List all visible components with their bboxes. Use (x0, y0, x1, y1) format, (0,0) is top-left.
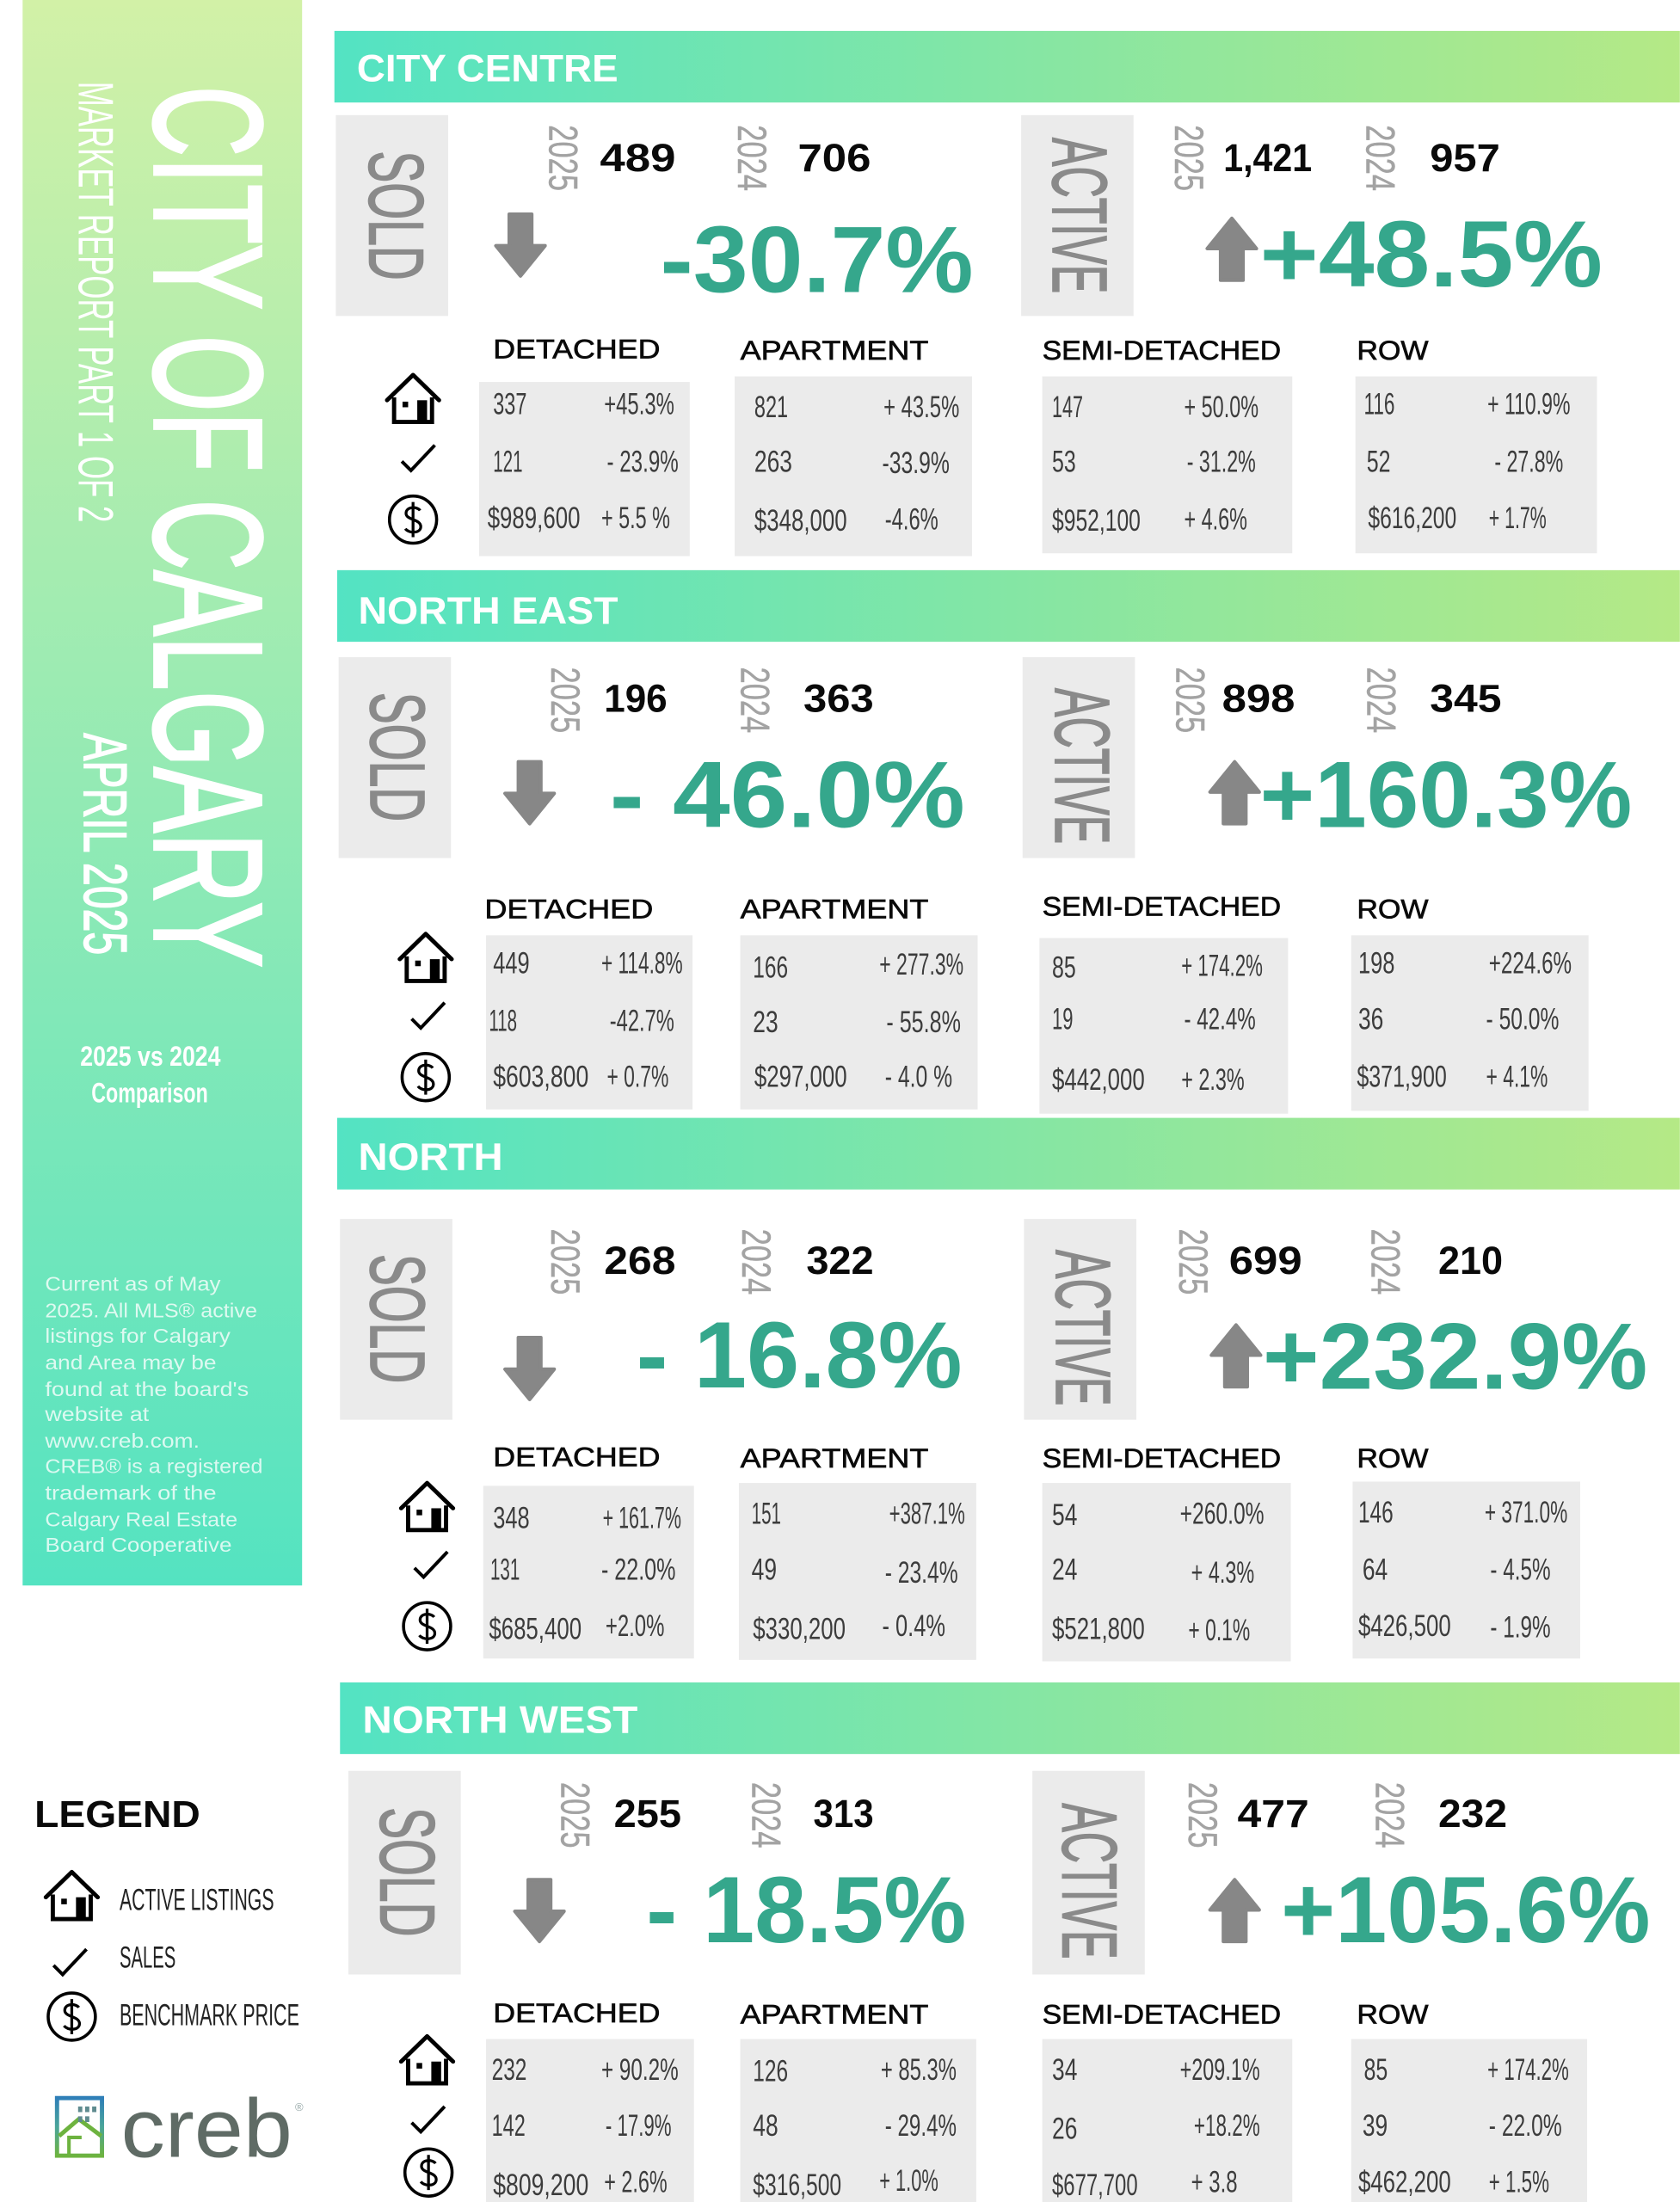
sold label: SOLD (353, 151, 439, 280)
icon: check (412, 2107, 445, 2131)
banner title: NORTH EAST (358, 590, 618, 632)
table: row: 64 (1363, 1553, 1388, 1587)
icon: house (400, 934, 452, 981)
panel: north (337, 1118, 1680, 1661)
table: semi-detached: + 174.2% (1181, 950, 1263, 983)
comparison label line two: Comparison (91, 1077, 208, 1109)
creb logo (57, 2083, 304, 2175)
table: semi-detached: + 0.1% (1188, 1614, 1250, 1647)
sold box (348, 1771, 461, 1975)
disclaimer text: listings for Calgary (45, 1325, 231, 1347)
active 2025 value: 699 (1229, 1239, 1302, 1282)
table: detached: + 161.7% (603, 1501, 681, 1535)
sold percent change: - 16.8% (637, 1303, 963, 1408)
table: apartment: + 85.3% (881, 2053, 957, 2087)
table: row: - 27.8% (1494, 446, 1563, 479)
icon: house (401, 1483, 453, 1530)
report date: APRIL 2025 (71, 733, 139, 955)
table: detached: - 22.0% (601, 1553, 675, 1587)
table: row: +224.6% (1489, 946, 1572, 980)
arrow down (515, 1879, 564, 1941)
legend sales: SALES (120, 1941, 175, 1974)
table: detached: 232 (492, 2053, 526, 2087)
legend heading: LEGEND (34, 1794, 200, 1836)
table: row (1356, 377, 1597, 553)
table: semi-detached (1043, 2039, 1292, 2202)
table: semi-detached: - 31.2% (1187, 446, 1256, 479)
table: apartment: - 4.0 % (885, 1061, 952, 1094)
table: apartment: - 55.8% (886, 1006, 961, 1039)
heading detached: DETACHED (493, 1997, 661, 2028)
sold label: SOLD (354, 1254, 440, 1383)
arrow up (1211, 1325, 1260, 1387)
table: detached: $809,200 (493, 2168, 588, 2202)
table: row: $371,900 (1357, 1061, 1447, 1094)
year 2025: 2025 (1166, 125, 1211, 191)
heading apartment: APARTMENT (741, 1442, 928, 1473)
table: semi-detached: 26 (1052, 2113, 1077, 2146)
table: row: 85 (1363, 2053, 1388, 2087)
icon: dollar (403, 1602, 451, 1650)
table: row: + 1.5% (1489, 2166, 1549, 2199)
table: row: + 174.2% (1487, 2053, 1569, 2087)
year 2025: 2025 (540, 125, 586, 191)
icon: house (401, 2036, 453, 2083)
table: semi-detached: 54 (1052, 1498, 1077, 1532)
year 2024: 2024 (1362, 1229, 1407, 1295)
year 2025: 2025 (542, 1229, 588, 1295)
heading semi-detached: SEMI-DETACHED (1043, 1999, 1281, 2030)
table: row: - 4.5% (1490, 1553, 1551, 1587)
table: apartment: +387.1% (889, 1497, 965, 1530)
table: semi-detached: 24 (1052, 1553, 1077, 1587)
table: apartment: 23 (753, 1006, 778, 1039)
icon: check (415, 1552, 447, 1577)
heading row: ROW (1357, 1442, 1429, 1473)
year 2025: 2025 (1179, 1782, 1225, 1848)
sold percent change: - 46.0% (610, 743, 965, 848)
active label: ACTIVE (1039, 1250, 1125, 1405)
table: row: 39 (1363, 2109, 1388, 2143)
table: detached: 142 (492, 2109, 526, 2143)
table: apartment (735, 377, 972, 557)
sold box (340, 1219, 452, 1420)
panel: north west (340, 1682, 1680, 2202)
table: semi-detached: - 42.4% (1184, 1003, 1256, 1036)
active percent change: +48.5% (1260, 202, 1603, 307)
table: semi-detached: $521,800 (1052, 1612, 1145, 1645)
active label: ACTIVE (1038, 688, 1124, 844)
sidebar subtitle: MARKET REPORT PART 1 OF 2 (68, 82, 123, 522)
active 2024 value: 210 (1438, 1239, 1503, 1282)
legend active listings: ACTIVE LISTINGS (120, 1883, 274, 1916)
table: row: + 110.9% (1487, 388, 1570, 421)
table: apartment: $348,000 (754, 504, 847, 538)
table: semi-detached (1043, 1483, 1291, 1661)
disclaimer text: CREB® is a registered (45, 1455, 262, 1478)
table: apartment: -33.9% (882, 446, 950, 480)
active 2025 value: 477 (1238, 1792, 1309, 1836)
icon: dollar (390, 496, 437, 544)
creb logo: creb (121, 2083, 292, 2175)
sold 2024 value: 363 (803, 677, 874, 721)
table: detached: 449 (493, 946, 530, 980)
active box (1032, 1771, 1145, 1975)
table: row: - 50.0% (1486, 1003, 1559, 1036)
heading semi-detached: SEMI-DETACHED (1043, 335, 1281, 366)
table: apartment (741, 2039, 976, 2202)
table: apartment: 151 (752, 1497, 781, 1530)
icon: check (402, 446, 434, 471)
active percent change: +160.3% (1260, 743, 1632, 848)
active 2025 value: 898 (1222, 677, 1295, 721)
table: detached: + 2.6% (604, 2166, 668, 2199)
banner (340, 1682, 1680, 1754)
year 2024: 2024 (1366, 1782, 1412, 1848)
disclaimer text (44, 1272, 262, 1556)
table: detached: +45.3% (604, 388, 674, 421)
table: detached: -42.7% (610, 1004, 674, 1037)
table: apartment: + 43.5% (883, 391, 959, 424)
heading detached: DETACHED (484, 894, 653, 925)
table: apartment: 126 (753, 2055, 788, 2088)
table: apartment: 166 (753, 950, 788, 984)
sold 2025 value: 196 (604, 677, 668, 721)
table: row: + 1.7% (1489, 501, 1547, 535)
banner (335, 31, 1680, 102)
table: detached: 118 (489, 1004, 517, 1037)
table: detached: $685,400 (489, 1612, 582, 1645)
table: semi-detached: $677,700 (1052, 2168, 1138, 2202)
disclaimer text: www.creb.com. (44, 1430, 200, 1452)
table: detached: + 5.5 % (601, 501, 670, 535)
banner (337, 1118, 1680, 1190)
active 2024 value: 957 (1430, 136, 1500, 180)
table: apartment: -4.6% (885, 503, 938, 537)
table: apartment: $297,000 (754, 1061, 847, 1094)
heading apartment: APARTMENT (741, 335, 928, 366)
table: semi-detached: +260.0% (1180, 1497, 1265, 1530)
table: semi-detached (1039, 938, 1288, 1114)
table: semi-detached: +18.2% (1194, 2109, 1260, 2143)
year 2025: 2025 (1167, 667, 1213, 733)
arrow up (1210, 1879, 1259, 1941)
table: apartment: 821 (754, 391, 788, 424)
active percent change: +232.9% (1263, 1305, 1647, 1410)
heading row: ROW (1357, 1999, 1429, 2030)
table: semi-detached: +209.1% (1180, 2053, 1260, 2087)
sidebar panel (22, 0, 302, 1585)
table: detached (479, 382, 690, 557)
table: apartment: + 277.3% (879, 948, 963, 981)
heading apartment: APARTMENT (741, 894, 928, 925)
year 2025: 2025 (1170, 1229, 1215, 1295)
table: row: + 371.0% (1485, 1496, 1567, 1529)
sold 2025 value: 255 (614, 1792, 681, 1836)
table: apartment: $316,500 (753, 2168, 841, 2202)
table: semi-detached: $442,000 (1052, 1063, 1145, 1097)
table: apartment: - 0.4% (882, 1609, 945, 1643)
icon: check (412, 1003, 445, 1028)
arrow down (505, 1338, 554, 1399)
table: semi-detached: + 2.3% (1181, 1063, 1245, 1097)
table: semi-detached: $952,100 (1052, 504, 1141, 538)
table: detached: + 90.2% (601, 2053, 679, 2087)
year 2025: 2025 (542, 667, 588, 733)
banner title: NORTH (358, 1136, 503, 1178)
sold label: SOLD (354, 692, 440, 821)
comparison label: 2025 vs 2024 (80, 1040, 220, 1072)
disclaimer text: 2025. All MLS® active (45, 1299, 257, 1321)
active label: ACTIVE (1036, 138, 1122, 293)
sold 2024 value: 313 (813, 1792, 874, 1836)
icon: dollar (402, 1054, 449, 1101)
table: detached (486, 935, 692, 1110)
table: row: - 22.0% (1489, 2109, 1562, 2143)
disclaimer text: found at the board's (45, 1378, 249, 1400)
table: detached: +2.0% (606, 1609, 664, 1643)
arrow up (1207, 218, 1257, 280)
disclaimer text: trademark of the (45, 1482, 217, 1504)
table: semi-detached (1043, 377, 1292, 553)
sold 2024 value: 706 (798, 136, 871, 180)
table: detached: 121 (493, 446, 523, 479)
table: apartment: - 23.4% (885, 1556, 958, 1590)
table: row: 36 (1358, 1003, 1383, 1036)
disclaimer text: and Area may be (45, 1351, 217, 1374)
table: row: - 1.9% (1490, 1611, 1551, 1645)
table: apartment: 48 (753, 2109, 778, 2143)
panel: city centre (335, 31, 1680, 557)
heading apartment: APARTMENT (741, 1999, 928, 2030)
legend benchmark price: BENCHMARK PRICE (120, 1998, 299, 2032)
year 2024: 2024 (729, 125, 774, 191)
active label: ACTIVE (1045, 1803, 1131, 1959)
heading semi-detached: SEMI-DETACHED (1043, 1442, 1281, 1473)
year 2024: 2024 (733, 1229, 778, 1295)
sold 2025 value: 489 (600, 136, 675, 180)
sold percent change: -30.7% (661, 208, 974, 313)
disclaimer text: Calgary Real Estate (45, 1509, 237, 1531)
table: detached (483, 1485, 694, 1658)
table: apartment: 49 (752, 1553, 777, 1587)
table: row: + 4.1% (1486, 1061, 1548, 1094)
disclaimer text: Current as of May (45, 1272, 221, 1295)
banner title: NORTH WEST (362, 1700, 637, 1742)
active percent change: +105.6% (1281, 1858, 1651, 1963)
disclaimer text: Board Cooperative (45, 1534, 232, 1556)
heading row: ROW (1357, 894, 1429, 925)
table: row: $462,200 (1358, 2166, 1451, 2199)
table: apartment: - 29.4% (885, 2109, 957, 2143)
active 2024 value: 232 (1438, 1792, 1507, 1836)
table: semi-detached: 53 (1052, 446, 1076, 479)
year 2024: 2024 (742, 1782, 788, 1848)
year 2024: 2024 (1357, 125, 1403, 191)
arrow down (495, 214, 545, 276)
arrow up (1210, 762, 1259, 824)
sold box (335, 115, 448, 316)
banner (337, 570, 1680, 642)
active box (1023, 657, 1135, 858)
sold 2024 value: 322 (806, 1239, 874, 1282)
table: detached: $603,800 (493, 1061, 588, 1094)
heading detached: DETACHED (493, 1441, 661, 1472)
table: row: 116 (1363, 388, 1394, 421)
table: row: $426,500 (1358, 1609, 1451, 1643)
sidebar title: CITY OF CALGARY (121, 86, 294, 968)
year 2024: 2024 (731, 667, 777, 733)
icon: house (387, 375, 439, 422)
table: semi-detached: 85 (1052, 950, 1076, 984)
active 2024 value: 345 (1430, 677, 1501, 721)
banner title: CITY CENTRE (357, 48, 618, 90)
table: apartment (739, 1483, 976, 1660)
active box (1021, 115, 1134, 316)
table: apartment: + 1.0% (879, 2164, 938, 2198)
active box (1024, 1219, 1136, 1420)
icon: dollar (405, 2149, 452, 2196)
table: semi-detached: + 3.8 (1191, 2166, 1238, 2199)
heading row: ROW (1357, 335, 1429, 366)
sold 2025 value: 268 (604, 1239, 675, 1282)
table: semi-detached: 34 (1052, 2053, 1077, 2087)
table: semi-detached: + 50.0% (1184, 391, 1258, 424)
table: detached: 337 (493, 388, 526, 421)
icon: check (53, 1949, 87, 1975)
heading semi-detached: SEMI-DETACHED (1043, 890, 1281, 921)
icon: dollar (48, 1993, 95, 2040)
table: detached (486, 2039, 694, 2202)
table: detached: 348 (493, 1501, 530, 1535)
table: row (1352, 1481, 1580, 1658)
year 2024: 2024 (1358, 667, 1404, 733)
table: apartment: $330,200 (753, 1612, 846, 1645)
heading detached: DETACHED (493, 333, 661, 364)
table: apartment: 263 (754, 446, 792, 479)
table: detached: $989,600 (488, 501, 580, 535)
table: row (1351, 935, 1589, 1110)
table: detached: 131 (490, 1553, 520, 1587)
table: row: $616,200 (1368, 501, 1456, 535)
sold percent change: - 18.5% (646, 1858, 966, 1963)
active 2025 value: 1,421 (1223, 136, 1312, 180)
table: detached: + 0.7% (606, 1061, 668, 1094)
table: row: 146 (1358, 1496, 1394, 1529)
table: row: 198 (1358, 946, 1394, 980)
table: semi-detached: + 4.6% (1184, 503, 1247, 537)
creb logo: ® (295, 2101, 304, 2113)
table: semi-detached: 147 (1052, 391, 1083, 424)
table: detached: - 23.9% (606, 446, 679, 479)
table: row: 52 (1367, 446, 1391, 479)
table: row (1351, 2039, 1587, 2202)
sold label: SOLD (364, 1807, 450, 1936)
table: detached: - 17.9% (606, 2109, 672, 2143)
sold box (339, 657, 451, 858)
year 2025: 2025 (551, 1782, 597, 1848)
table: detached: + 114.8% (601, 946, 683, 980)
disclaimer text: website at (44, 1403, 150, 1425)
icon: house (46, 1872, 98, 1919)
panel: north east (337, 570, 1680, 1114)
table: semi-detached: + 4.3% (1191, 1556, 1254, 1590)
legend (34, 1794, 299, 2040)
arrow down (505, 762, 554, 824)
table: apartment (741, 935, 977, 1110)
table: semi-detached: 19 (1052, 1003, 1074, 1036)
